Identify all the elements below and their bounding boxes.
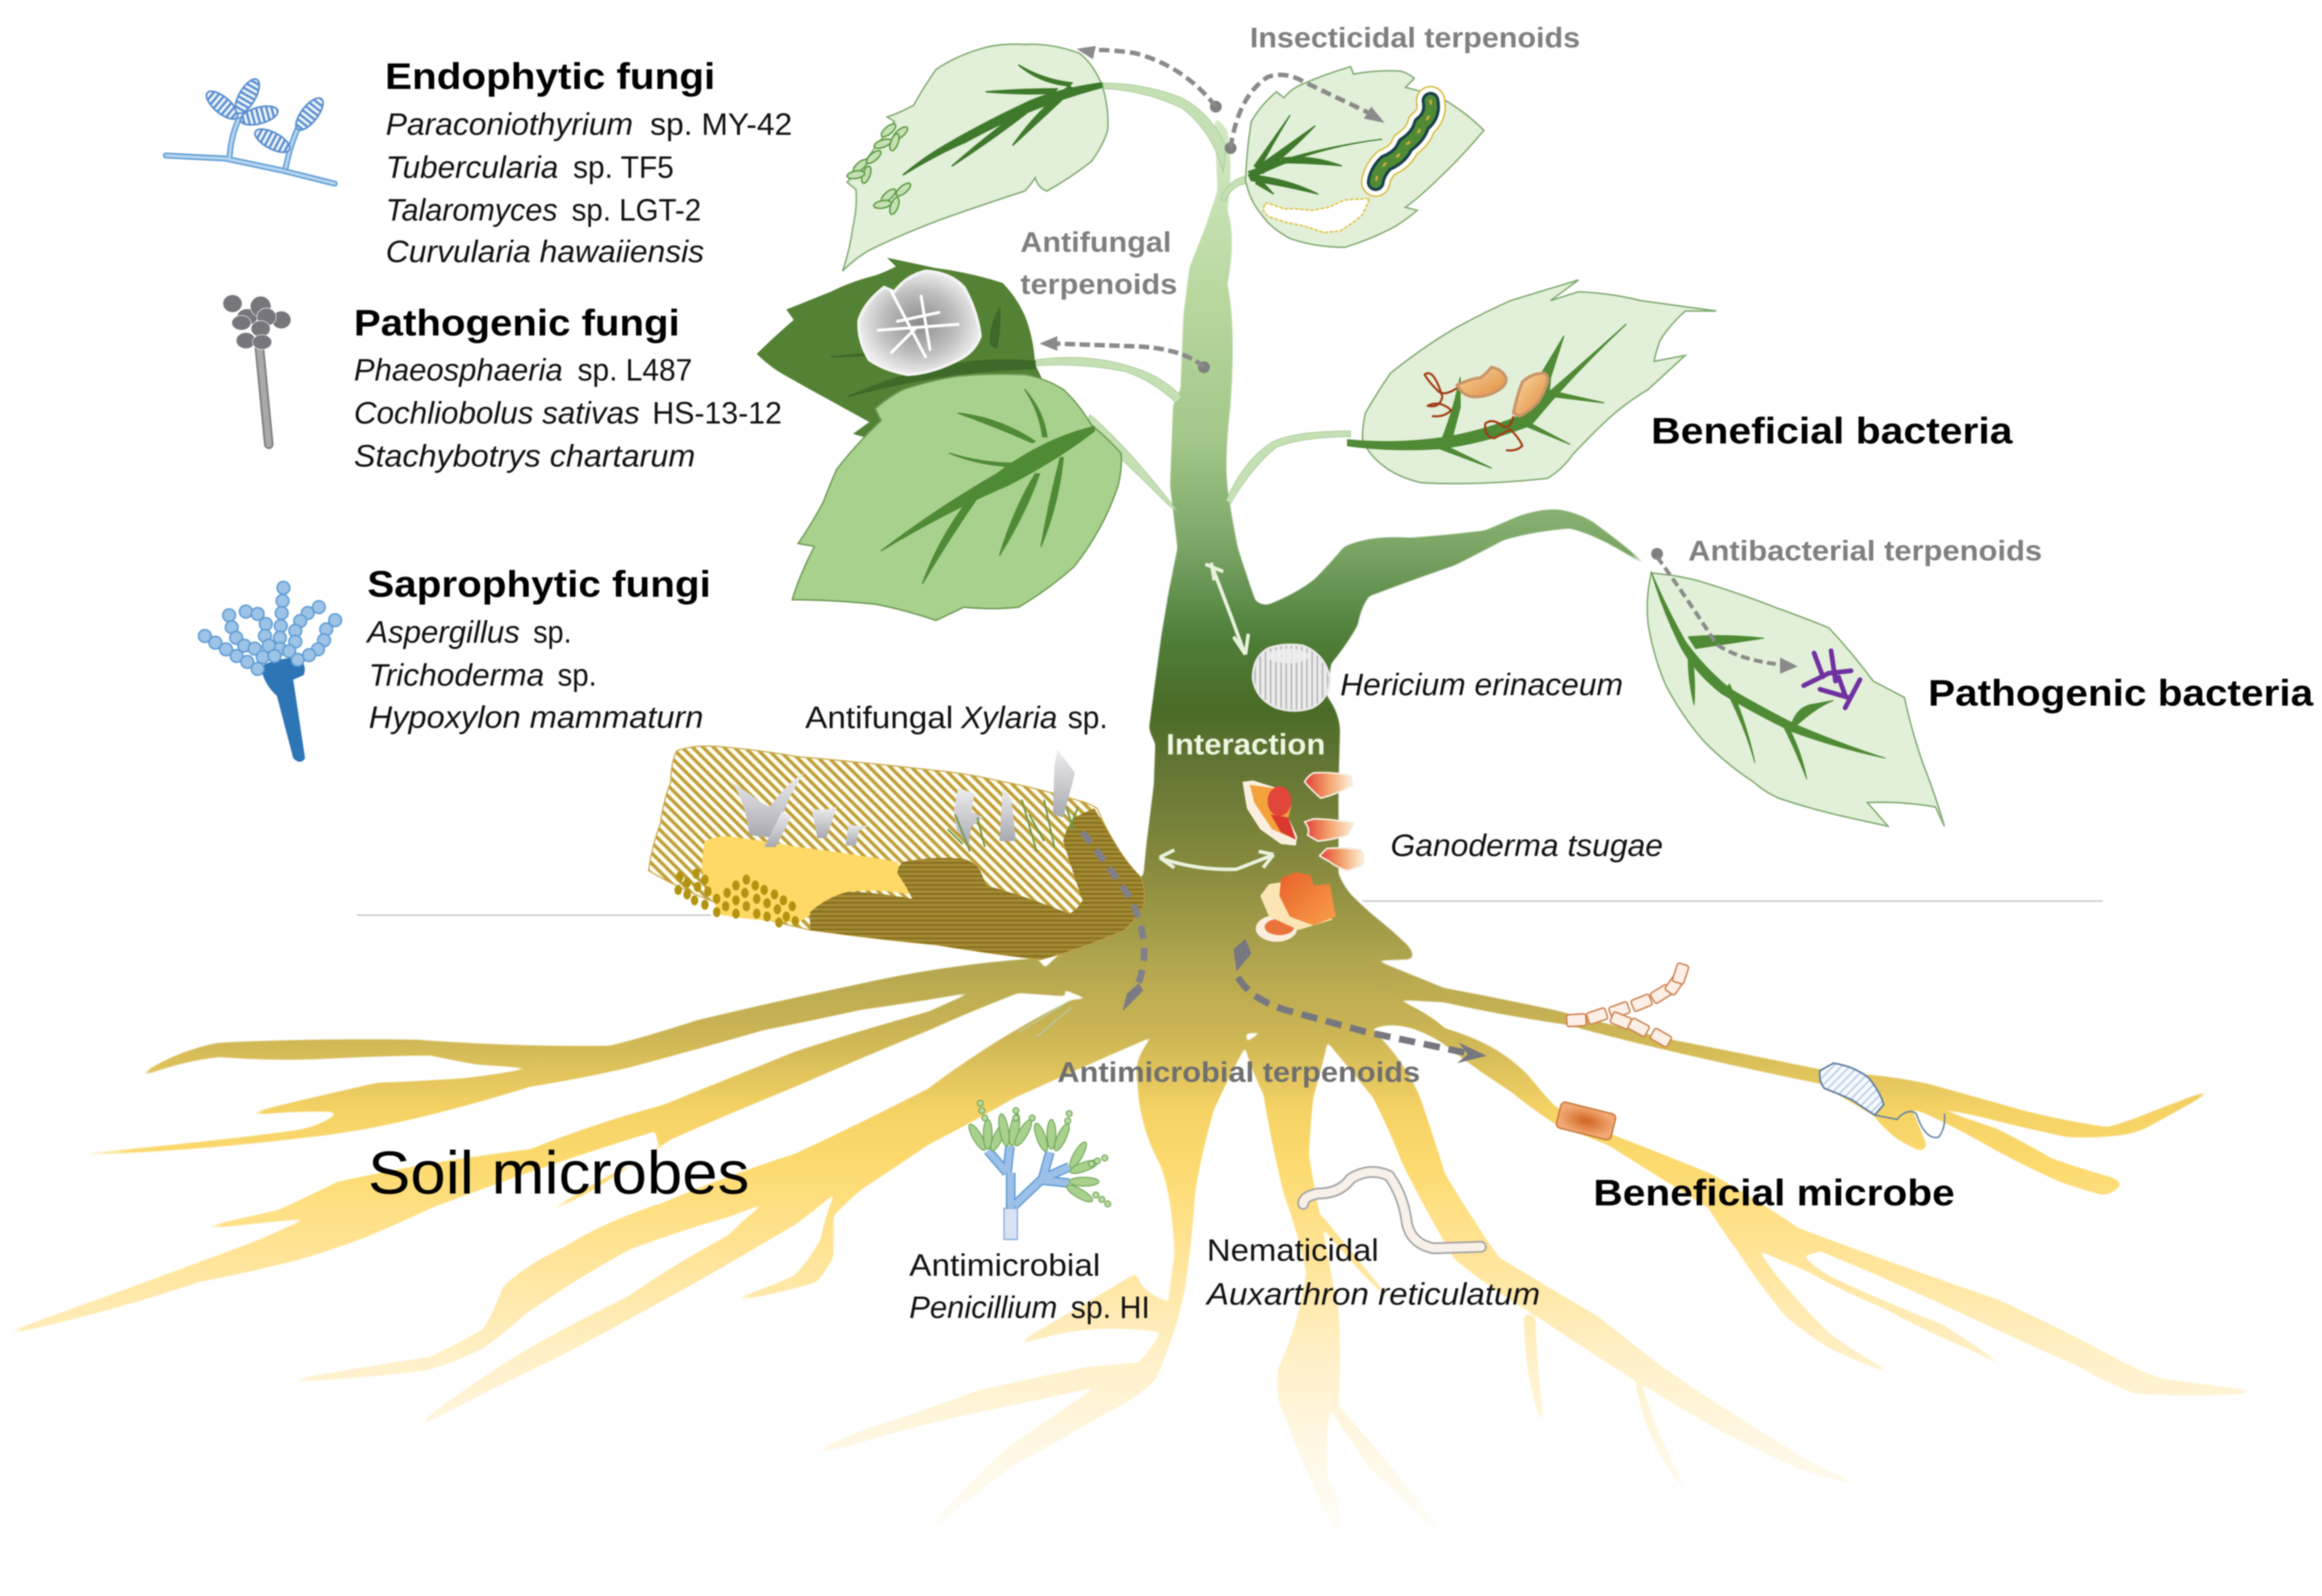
heading: saprophytic fungi list: Trichoderma <box>369 658 544 692</box>
mushroom: Ganoderma tsugae <box>1243 773 1363 942</box>
heading: saprophytic fungi list: sp. <box>533 615 572 650</box>
arrow: antimicrobial from log <box>1083 832 1144 1012</box>
icon: purple pathogenic bacteria <box>1803 651 1860 708</box>
icon: bacteria beans <box>1425 367 1548 450</box>
label: antimicrobial Penicillium: Penicillium <box>910 1290 1057 1325</box>
icon: saprophytic fungus <box>199 581 341 762</box>
fallen log with Xylaria <box>648 746 1144 960</box>
icon: orange soil cell <box>1556 1101 1616 1140</box>
arrow: antifungal <box>1039 336 1210 373</box>
icon: Penicillium <box>966 1100 1110 1239</box>
stem petioles <box>1035 83 1351 511</box>
leaf: large medium green <box>792 374 1121 621</box>
heading: pathogenic fungi list: Stachybotrys chartarum <box>354 439 695 473</box>
label: antifungal terpenoids: terpenoids <box>1020 269 1177 300</box>
label: nematicidal Auxarthron: Nematicidal <box>1207 1233 1378 1268</box>
heading: saprophytic fungi list: Hypoxylon mammaturn <box>369 700 703 734</box>
heading: endophytic fungi list: sp. LGT-2 <box>572 193 701 228</box>
label: antifungal terpenoids: Antifungal <box>1020 227 1171 258</box>
mushroom: Hericium erinaceum <box>1253 644 1330 711</box>
label: antimicrobial Penicillium <box>910 1248 1150 1325</box>
leaf: dark infected leaf <box>756 258 1066 444</box>
heading: saprophytic fungi list: Aspergillus <box>366 615 520 650</box>
label: antimicrobial terpenoids: Antimicrobial terpenoids <box>1057 1057 1420 1088</box>
leaf: beneficial bacteria <box>1348 280 1716 484</box>
icon: Xylaria fruiting bodies <box>732 749 1075 847</box>
heading: endophytic fungi list: Tubercularia <box>386 150 558 185</box>
heading: pathogenic fungi list: sp. L487 <box>577 353 692 387</box>
label: antifungal terpenoids <box>1020 227 1177 300</box>
icon: caterpillar <box>1376 100 1431 182</box>
label: Ganoderma tsugae: Ganoderma tsugae <box>1391 828 1663 863</box>
arrows: white interaction <box>1160 563 1273 870</box>
icon: nematode <box>1303 1172 1481 1248</box>
arrow: antimicrobial to root microbes <box>1233 939 1487 1063</box>
arrow: antibacterial <box>1651 548 1798 674</box>
icon: endophytic fungus <box>166 76 335 184</box>
heading: pathogenic fungi list: Pathogenic fungi <box>354 302 680 344</box>
heading: endophytic fungi list: sp. MY-42 <box>650 107 792 141</box>
label: antifungal Xylaria: Antifungal <box>805 700 953 735</box>
heading: endophytic fungi list: Curvularia hawaiiensis <box>386 234 704 269</box>
label: beneficial microbe: Beneficial microbe <box>1593 1172 1955 1213</box>
arrow: insecticidal to upper left leaf <box>1076 46 1222 113</box>
icon: fungal lesion <box>859 271 981 375</box>
label: Hericium erinaceum: Hericium erinaceum <box>1340 668 1623 702</box>
heading: pathogenic fungi list <box>354 302 782 473</box>
soil line <box>357 901 2103 915</box>
leaf: pathogenic bacteria <box>1647 572 1944 826</box>
label: antibacterial terpenoids: Antibacterial terpenoids <box>1688 536 2042 567</box>
heading: endophytic fungi list: Endophytic fungi <box>385 55 715 97</box>
icon: leaf damage trail <box>1263 199 1370 233</box>
heading: pathogenic fungi list: Cochliobolus sativas <box>354 396 640 430</box>
label: interaction: Interaction <box>1166 728 1325 760</box>
label: antifungal Xylaria: Xylaria <box>960 700 1057 735</box>
heading: saprophytic fungi list: sp. <box>558 658 597 692</box>
label: antimicrobial Penicillium: Antimicrobial <box>910 1248 1100 1282</box>
icon: gold spore clusters <box>674 868 799 927</box>
icon: hatched bacterium with flagellum <box>1820 1063 1945 1138</box>
icon: moss <box>948 800 1078 852</box>
leaf: caterpillar <box>1246 66 1484 247</box>
icon: green clusters on leaf <box>847 122 912 215</box>
heading: pathogenic fungi list: HS-13-12 <box>653 396 782 430</box>
heading: endophytic fungi list <box>385 55 792 269</box>
label: nematicidal Auxarthron: Auxarthron reticulatum <box>1205 1277 1540 1311</box>
heading: saprophytic fungi list: Saprophytic fungi <box>367 563 711 605</box>
label: insecticidal terpenoids: Insecticidal terpenoids <box>1250 23 1580 54</box>
label: beneficial bacteria: Beneficial bacteria <box>1651 410 2014 452</box>
heading: endophytic fungi list: sp. TF5 <box>573 150 674 185</box>
arrow: insecticidal to caterpillar <box>1225 75 1385 154</box>
fine rootlet lines <box>1019 1001 1072 1036</box>
label: pathogenic bacteria: Pathogenic bacteria <box>1928 672 2314 714</box>
label: soil microbes: Soil microbes <box>368 1139 750 1207</box>
icon: beneficial hyphae on root <box>1566 963 1689 1047</box>
icon: pathogenic fungus <box>223 294 291 444</box>
heading: saprophytic fungi list <box>366 563 711 734</box>
label: nematicidal Auxarthron <box>1205 1233 1540 1311</box>
label: antifungal Xylaria: sp. <box>1068 700 1108 735</box>
heading: pathogenic fungi list: Phaeosphaeria <box>354 353 562 387</box>
heading: endophytic fungi list: Talaromyces <box>386 193 558 228</box>
label: antimicrobial Penicillium: sp. HI <box>1071 1290 1150 1325</box>
heading: endophytic fungi list: Paraconiothyrium <box>386 107 633 141</box>
leaf: top left with endophyte clusters <box>843 44 1108 271</box>
